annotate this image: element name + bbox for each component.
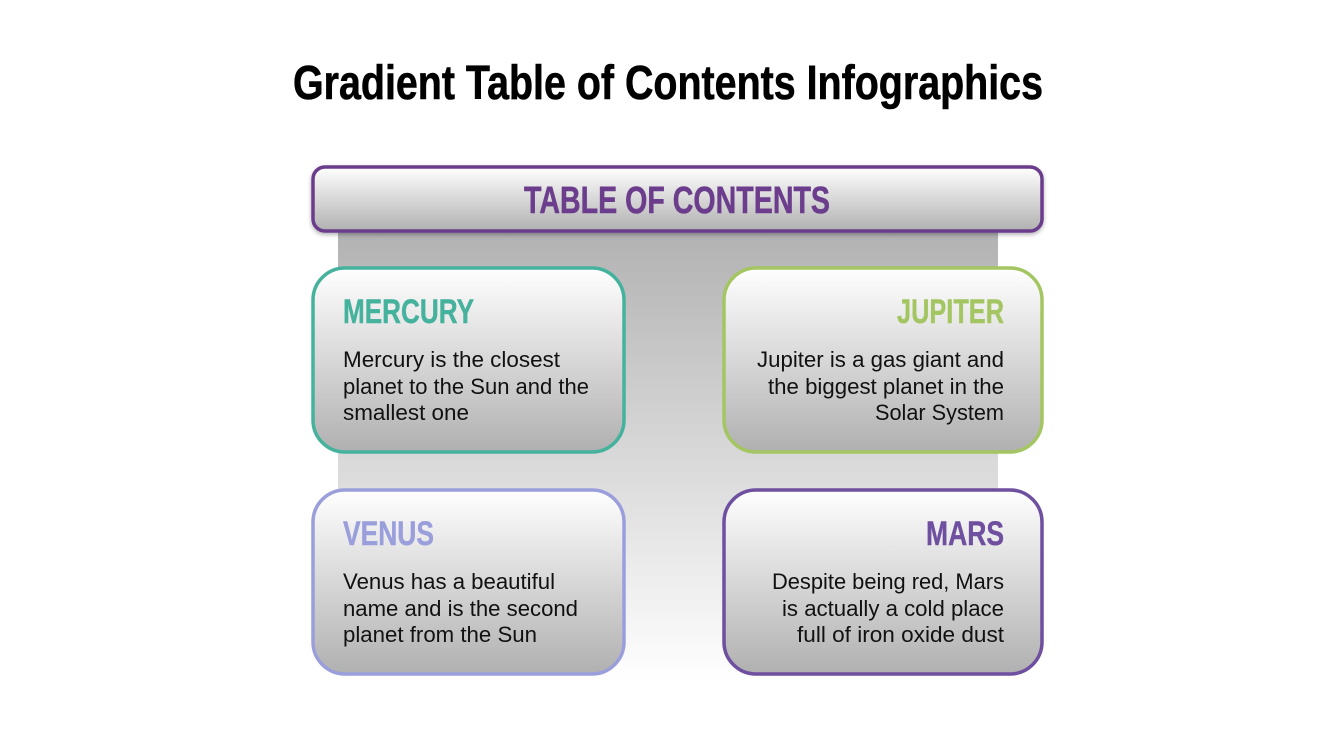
panel: jupiter: JUPITER <box>897 293 1004 331</box>
panel: mercury: MERCURY <box>343 293 474 331</box>
panel: jupiter: Solar System <box>875 400 1004 425</box>
header banner: table of contents: TABLE OF CONTENTS <box>524 180 830 222</box>
panel: venus <box>313 490 624 674</box>
panel: mars: full of iron oxide dust <box>797 622 1005 647</box>
background gradient panel <box>338 232 998 682</box>
panel: jupiter: the biggest planet in the <box>768 374 1004 399</box>
panel: mercury: smallest one <box>343 400 469 425</box>
panel: jupiter: Jupiter is a gas giant and <box>757 347 1004 372</box>
panel: mercury: planet to the Sun and the <box>343 374 589 399</box>
panel: venus: name and is the second <box>343 596 578 621</box>
panel: mars: is actually a cold place <box>782 596 1004 621</box>
title: Gradient Table of Contents Infographics <box>293 57 1043 110</box>
panel: mercury: Mercury is the closest <box>343 347 561 372</box>
panel: jupiter <box>724 268 1042 452</box>
panel: mars: Despite being red, Mars <box>772 569 1004 594</box>
panel: venus: Venus has a beautiful <box>343 569 555 594</box>
header banner: table of contents <box>313 167 1042 231</box>
panel: venus: planet from the Sun <box>343 622 537 647</box>
panel: mercury <box>313 268 624 452</box>
panel: mars: MARS <box>926 515 1004 553</box>
panel: mars <box>724 490 1042 674</box>
panel: venus: VENUS <box>343 515 434 553</box>
